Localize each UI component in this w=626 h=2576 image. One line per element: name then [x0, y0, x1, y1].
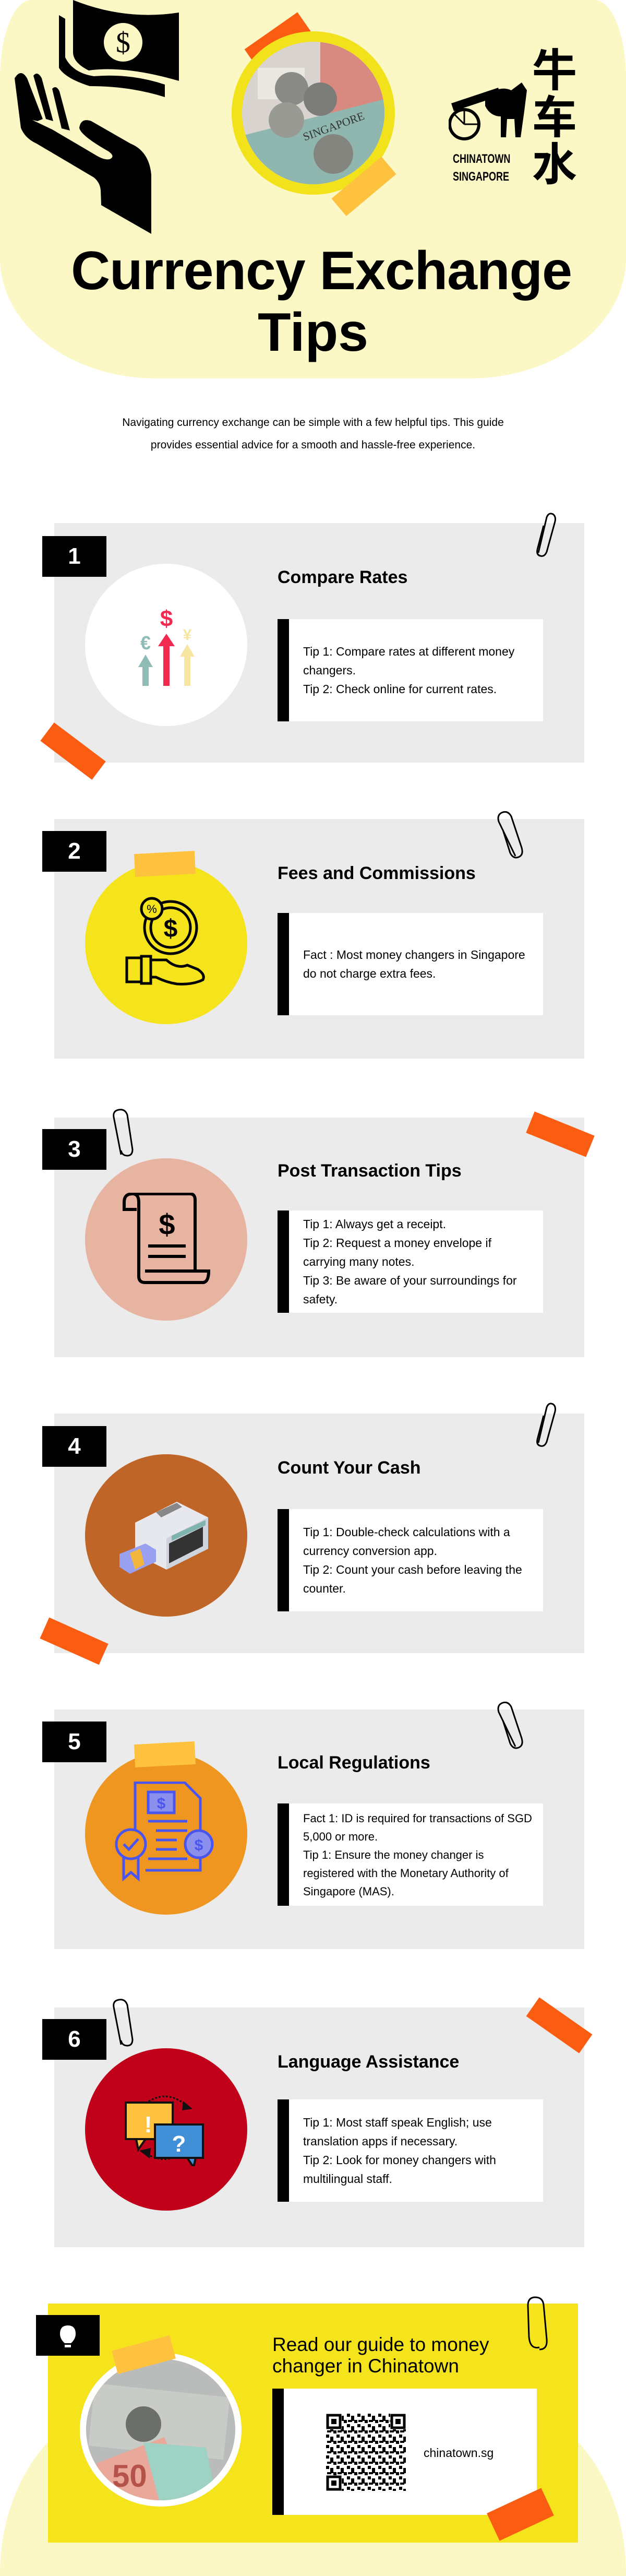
icon: certificate: [85, 1752, 247, 1915]
title: Currency Exchange: [71, 241, 572, 301]
tape: [134, 1741, 196, 1767]
panel 5: regulations: [54, 1710, 584, 1949]
icon: receipt: [85, 1158, 247, 1321]
tips box: Tip 1: Compare rates at different money changers.: [303, 645, 514, 677]
number 2: [42, 831, 106, 872]
icon: hand with money: [15, 0, 179, 234]
heading: Post Transaction Tips: [278, 1161, 462, 1181]
tips box: Tip 2: Request a money envelope if carrying many notes.: [303, 1236, 491, 1268]
fact box: Fact : Most money changers in Singapore do not charge extra fees.: [303, 948, 525, 980]
icon: paperclip: [113, 1109, 134, 1157]
icon: speech bubbles: !: [144, 2112, 152, 2137]
number 6: 6: [68, 2026, 81, 2052]
icon: currency arrows: €: [140, 632, 151, 654]
tips box: Tip 2: Check online for current rates.: [303, 682, 497, 696]
number 5: 5: [68, 1729, 81, 1754]
tape: [526, 1997, 592, 2053]
logo: Chinatown Singapore: SINGAPORE: [453, 170, 509, 184]
logo: Chinatown Singapore: [449, 34, 577, 193]
tips box: Tip 1: Most staff speak English; use translation apps if necessary.: [303, 2116, 492, 2148]
tape: [40, 1618, 109, 1665]
facts box: [278, 1803, 543, 1906]
tips box: Tip 1: Always get a receipt.: [303, 1217, 446, 1231]
icon: currency arrows: ¥: [183, 626, 191, 643]
icon: paperclip: [498, 1702, 523, 1749]
photo: Singapore currency: SINGAPORE: [301, 109, 366, 144]
tape: [112, 2335, 176, 2374]
number 1: [42, 536, 106, 577]
icon: paperclip: [113, 1999, 134, 2046]
icon: paperclip: [527, 2297, 548, 2350]
intro text: provides essential advice for a smooth and hassle-free experience.: [151, 439, 475, 451]
icon: lightbulb: [36, 2315, 100, 2356]
number 3: 3: [68, 1136, 81, 1162]
icon: certificate: $: [194, 1836, 203, 1854]
heading: Local Regulations: [278, 1753, 430, 1773]
tips box: Tip 2: Look for money changers with multilingual staff.: [303, 2153, 496, 2186]
icon: currency arrows: $: [160, 606, 173, 632]
tips box: Tip 1: Double-check calculations with a currency conversion app.: [303, 1525, 510, 1558]
icon: paperclip: [536, 513, 556, 557]
heading: Read our guide to money: [272, 2334, 489, 2355]
logo: Chinatown Singapore: 牛: [532, 34, 577, 99]
tips box: [278, 2099, 543, 2202]
heading: Compare Rates: [278, 567, 407, 587]
QR code: [326, 2414, 406, 2491]
tape: [487, 2488, 554, 2541]
logo: Chinatown Singapore: CHINATOWN: [453, 152, 510, 166]
icon: money counter: [85, 1454, 247, 1617]
icon: hand with money: $: [116, 27, 130, 59]
intro text: [122, 417, 504, 451]
facts box: Tip 1: Ensure the money changer is registered with the Monetary Authority of Singapore (MAS).: [303, 1848, 509, 1898]
number 5: [42, 1722, 106, 1762]
tips box: [278, 1210, 543, 1313]
number 2: 2: [68, 838, 81, 864]
tips box: Tip 3: Be aware of your surroundings for safety.: [303, 1274, 517, 1306]
heading: Count Your Cash: [278, 1458, 421, 1478]
heading: [272, 2334, 489, 2377]
photo: Singapore currency: [232, 31, 395, 195]
icon: coin hand: %: [147, 902, 156, 916]
panel 4: count cash: [54, 1414, 584, 1653]
icon: coin hand: [85, 862, 247, 1024]
heading: changer in Chinatown: [272, 2355, 459, 2377]
number 1: 1: [68, 543, 81, 569]
panel 3: post transaction: [54, 1118, 584, 1357]
url text: chinatown.sg: [424, 2446, 493, 2460]
link box with QR: [272, 2389, 537, 2515]
tape: yellow bottom: [331, 157, 396, 216]
photo: dollar notes: 50: [112, 2459, 147, 2494]
number 6: [42, 2019, 106, 2060]
text: Tips: [258, 302, 368, 363]
number 4: [42, 1426, 106, 1467]
icon: coin hand: $: [163, 915, 177, 943]
icon: speech bubbles: ?: [172, 2131, 186, 2157]
logo: Chinatown Singapore: 车: [532, 81, 577, 146]
header background blob: [0, 0, 626, 378]
call to action panel: [48, 2304, 578, 2543]
tips box: Tip 2: Count your cash before leaving the counter.: [303, 1563, 522, 1595]
icon: receipt: $: [159, 1208, 175, 1240]
number 4: 4: [68, 1433, 81, 1459]
panel 1: compare rates: [54, 523, 584, 763]
tape: [40, 722, 106, 780]
photo: dollar notes: [80, 2353, 242, 2507]
icon: speech bubbles: [85, 2048, 247, 2211]
intro text: Navigating currency exchange can be simple with a few helpful tips. This guide: [122, 417, 504, 429]
icon: paperclip: [536, 1403, 556, 1447]
panel 6: language: [54, 2008, 584, 2247]
footer background blob: [0, 2401, 626, 2576]
tips box: [278, 1509, 543, 1611]
panel 2: fees: [54, 819, 584, 1059]
heading: Fees and Commissions: [278, 863, 476, 883]
heading: Language Assistance: [278, 2052, 459, 2072]
tape: orange top: [245, 12, 310, 68]
tips box: [278, 619, 543, 721]
fact box: [278, 913, 543, 1015]
logo: Chinatown Singapore: 水: [532, 128, 577, 193]
facts box: Fact 1: ID is required for transactions of SGD 5,000 or more.: [303, 1811, 532, 1843]
icon: paperclip: [498, 811, 523, 858]
tape: [134, 851, 196, 877]
icon: currency arrows: [85, 564, 247, 726]
number 3: [42, 1129, 106, 1170]
icon: certificate: $: [156, 1795, 165, 1812]
tape: [526, 1111, 595, 1157]
